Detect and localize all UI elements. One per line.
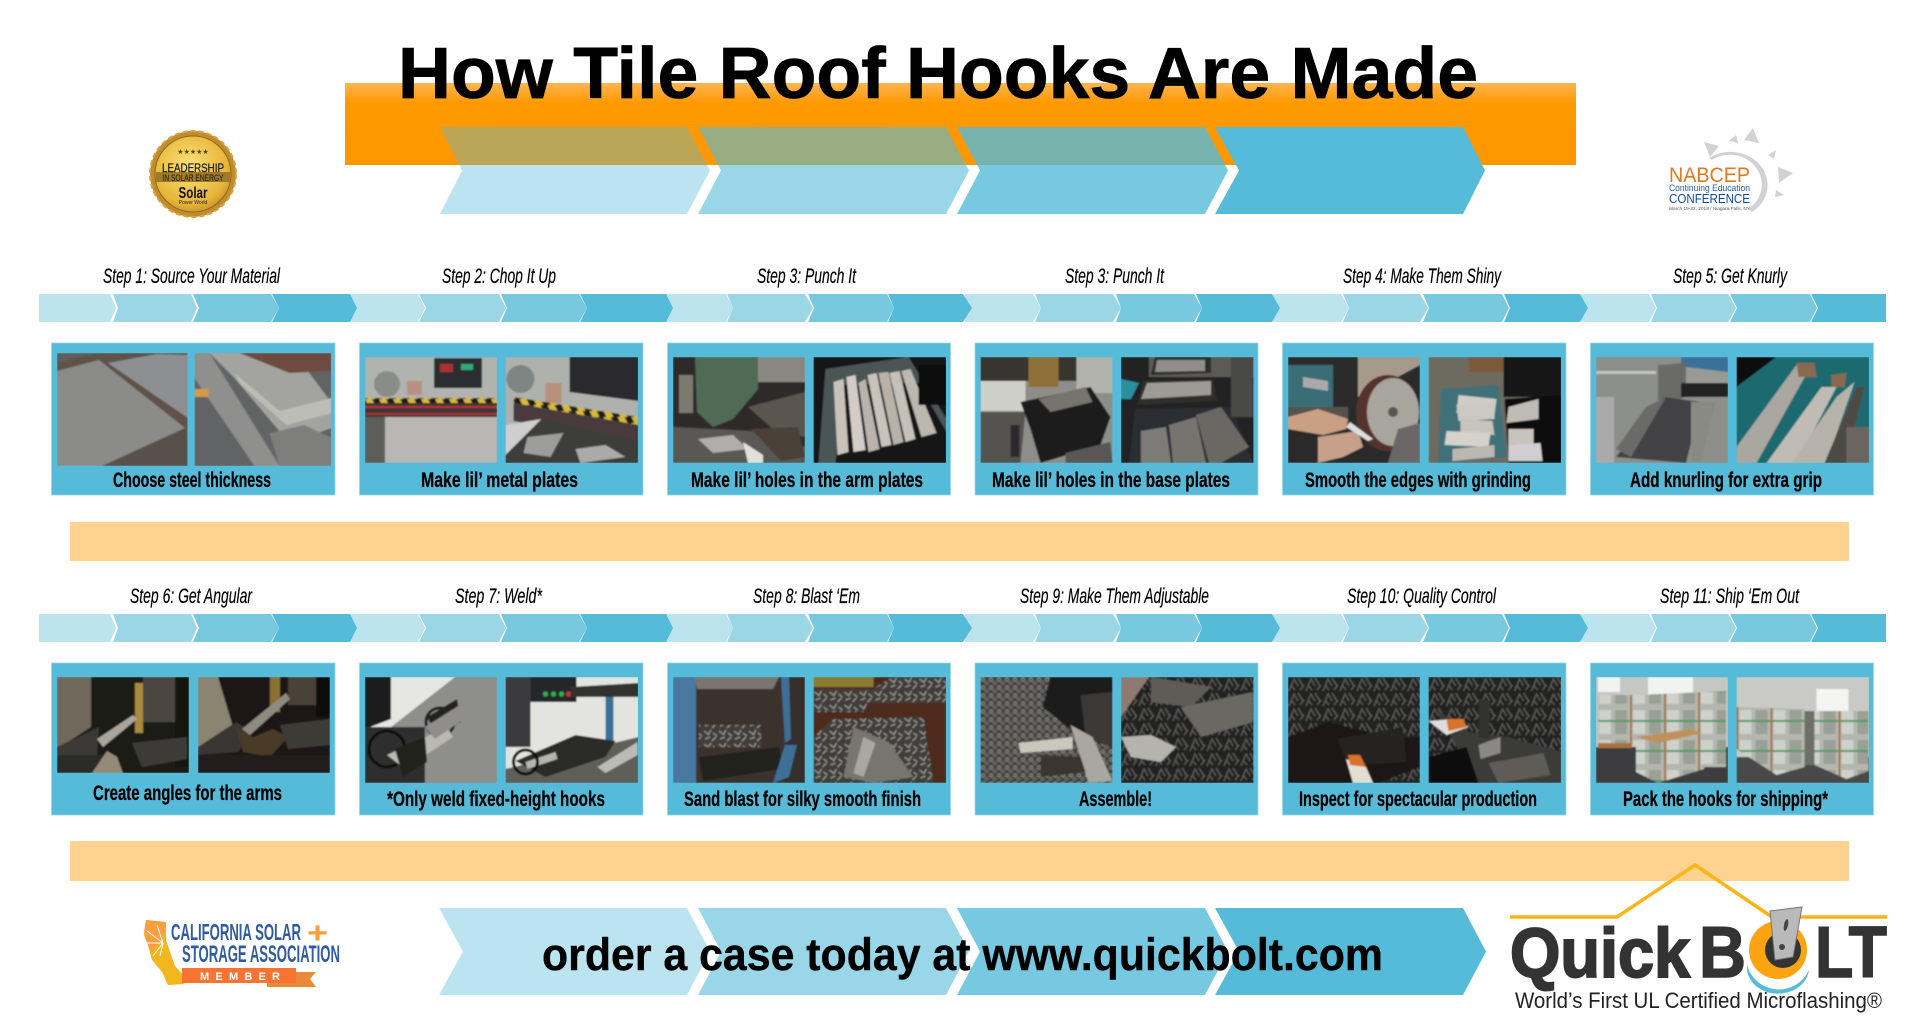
logo: NABCEP conference: CONFERENCE bbox=[1669, 191, 1750, 206]
panel: weld bbox=[360, 663, 643, 815]
photo: welding fixtures row bbox=[365, 677, 497, 783]
panel: grinding edges bbox=[1282, 343, 1566, 495]
caption: Sand blast for silky smooth finish bbox=[684, 788, 921, 811]
photo: bending press close up bbox=[198, 677, 330, 773]
badge: leadership in solar energy bbox=[150, 131, 236, 217]
photo: knurling roller bbox=[1596, 357, 1728, 463]
title: How Tile Roof Hooks Are Made bbox=[398, 34, 1478, 114]
chevron strip row 2 bbox=[39, 614, 1886, 642]
caption: Assemble! bbox=[1079, 788, 1152, 811]
step labels row 1: Step 1: Source Your Material bbox=[103, 265, 281, 288]
caption: Inspect for spectacular production bbox=[1299, 788, 1537, 811]
logo: QuickBolt: Quick bbox=[1510, 914, 1690, 992]
logo: California Solar + Storage Association: + bbox=[307, 917, 328, 950]
caption: Make lil’ holes in the arm plates bbox=[691, 469, 923, 492]
logo: California Solar + Storage Association: STORAGE ASSOCIATION bbox=[182, 941, 340, 968]
logo: California Solar + Storage Association: CALIFORNIA SOLAR bbox=[171, 919, 301, 945]
step labels row 2: Step 6: Get Angular bbox=[130, 585, 253, 608]
logo: QuickBolt bbox=[1510, 865, 1887, 1013]
panel: make metal plates bbox=[360, 343, 643, 495]
call to action chevron arrows bbox=[439, 908, 1486, 995]
photo: ground plates in crates bbox=[1428, 357, 1561, 463]
photo: welding machine bbox=[506, 677, 638, 783]
panel: choose steel thickness bbox=[52, 343, 335, 495]
photo: blast chamber bbox=[673, 677, 805, 783]
caption: Make lil’ metal plates bbox=[421, 469, 578, 492]
step labels row 1: Step 2: Chop It Up bbox=[442, 265, 556, 288]
panel: create angles bbox=[52, 663, 335, 815]
logo: QuickBolt: LT bbox=[1815, 913, 1887, 993]
photo: punch die bbox=[980, 357, 1112, 463]
logo: NABCEP conference bbox=[1669, 128, 1793, 212]
step labels row 2: Step 9: Make Them Adjustable bbox=[1020, 585, 1209, 608]
photo: punch press with arms bbox=[673, 357, 805, 463]
caption: Smooth the edges with grinding bbox=[1305, 469, 1531, 492]
logo: NABCEP conference: March 19-22, 2018 / Niagara Falls, NY bbox=[1669, 206, 1750, 211]
peach divider band lower bbox=[70, 841, 1849, 881]
photo: punched base plates in crates bbox=[1121, 357, 1254, 463]
photo: scrap bins bbox=[814, 677, 946, 783]
step labels row 2 bbox=[130, 585, 1800, 608]
caption: Pack the hooks for shipping* bbox=[1623, 788, 1829, 811]
badge: leadership in solar energy: Solar bbox=[178, 185, 208, 202]
step labels row 1: Step 3: Punch It bbox=[757, 265, 857, 288]
photo: punched arm plates in crate bbox=[814, 357, 946, 463]
step labels row 2: Step 11: Ship ‘Em Out bbox=[1660, 585, 1800, 608]
photo: crates in warehouse bbox=[1596, 677, 1728, 783]
photo: shear machine angled bbox=[506, 357, 638, 463]
photo: steel plates bbox=[57, 353, 188, 466]
caption: Make lil’ holes in the base plates bbox=[992, 469, 1230, 492]
badge: leadership in solar energy: ★★★★★ bbox=[177, 148, 209, 156]
panel: assemble bbox=[975, 663, 1258, 815]
logo: QuickBolt: World’s First UL Certified Microflashing® bbox=[1515, 988, 1882, 1013]
photo: pile of angled brackets bbox=[1121, 677, 1254, 783]
photo: crates in warehouse wide bbox=[1736, 677, 1869, 783]
caption: Add knurling for extra grip bbox=[1630, 469, 1822, 492]
chevron strip row 1 bbox=[39, 294, 1886, 322]
step labels row 1 bbox=[103, 265, 1788, 288]
badge: leadership in solar energy: Power World bbox=[179, 200, 207, 206]
panel: pack bbox=[1590, 663, 1874, 815]
photo: stacked steel plates bbox=[194, 353, 331, 466]
logo: California Solar + Storage Association: MEMBER bbox=[200, 971, 280, 983]
photo: inspection bench bbox=[1428, 677, 1561, 783]
step labels row 1: Step 5: Get Knurly bbox=[1673, 265, 1788, 288]
step labels row 2: Step 7: Weld* bbox=[455, 585, 543, 608]
call to action text: order a case today at www.quickbolt.com bbox=[542, 929, 1383, 980]
logo: California Solar + Storage Association bbox=[144, 917, 340, 987]
caption: Create angles for the arms bbox=[93, 782, 282, 805]
caption: Choose steel thickness bbox=[113, 469, 271, 492]
badge: leadership in solar energy: LEADERSHIP bbox=[162, 161, 224, 175]
panel: knurling bbox=[1590, 343, 1874, 495]
photo: bending press with glove bbox=[57, 677, 189, 773]
photo: inspection with glove bbox=[1288, 677, 1420, 783]
peach divider band upper bbox=[70, 522, 1849, 561]
panel: holes in base plates bbox=[975, 343, 1258, 495]
panel: sand blast bbox=[668, 663, 950, 815]
photo: hands at grinder belt bbox=[1288, 357, 1420, 463]
badge: leadership in solar energy: IN SOLAR ENERGY bbox=[162, 173, 224, 183]
step labels row 2: Step 8: Blast ‘Em bbox=[753, 585, 860, 608]
step labels row 1: Step 3: Punch It bbox=[1065, 265, 1165, 288]
logo: NABCEP conference: NABCEP bbox=[1669, 164, 1750, 187]
logo: QuickBolt: B bbox=[1699, 913, 1746, 993]
header chevron arrows bbox=[440, 127, 1485, 214]
panel: inspect bbox=[1282, 663, 1566, 815]
orange header band bbox=[345, 83, 1576, 165]
step labels row 1: Step 4: Make Them Shiny bbox=[1343, 265, 1502, 288]
step labels row 2: Step 10: Quality Control bbox=[1347, 585, 1497, 608]
caption: *Only weld fixed-height hooks bbox=[387, 788, 605, 811]
photo: shear machine front bbox=[365, 357, 497, 463]
photo: nuts and bracket bbox=[980, 677, 1112, 783]
panel: holes in arm plates bbox=[668, 343, 950, 495]
photo: knurled arms in crate bbox=[1736, 357, 1869, 463]
logo: NABCEP conference: Continuing Education bbox=[1669, 183, 1750, 194]
